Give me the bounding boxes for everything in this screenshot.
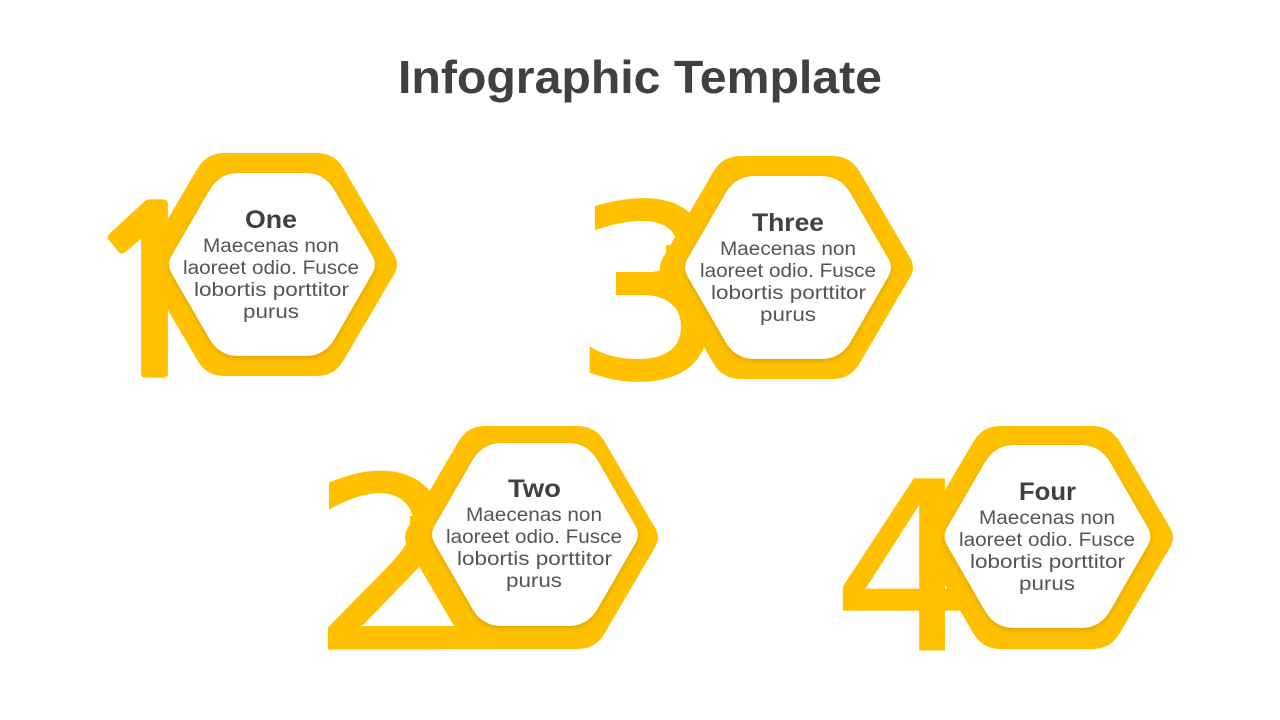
heading: One bbox=[245, 206, 297, 234]
panel: four bbox=[833, 426, 1173, 704]
body text: laoreet odio. Fusce bbox=[446, 527, 622, 548]
heading: Two bbox=[508, 475, 561, 503]
text block bbox=[183, 206, 359, 323]
body text: laoreet odio. Fusce bbox=[183, 258, 359, 279]
numeral 1: 1 bbox=[79, 181, 220, 411]
title: Infographic Template bbox=[398, 51, 882, 103]
body text: Maecenas non bbox=[979, 508, 1115, 529]
body text: laoreet odio. Fusce bbox=[959, 530, 1135, 551]
numeral 3: 3 bbox=[573, 156, 725, 434]
numeral 2: 2 bbox=[312, 428, 463, 704]
inner white hexagon bbox=[945, 445, 1150, 628]
outer hexagon bbox=[144, 153, 397, 376]
panel: two bbox=[312, 426, 658, 704]
body text: lobortis porttitor bbox=[711, 283, 867, 304]
body text: Maecenas non bbox=[720, 239, 856, 260]
outer hexagon bbox=[660, 156, 913, 379]
heading: Three bbox=[752, 209, 824, 237]
body text: Maecenas non bbox=[466, 505, 602, 526]
numeral 4: 4 bbox=[833, 434, 981, 704]
body text: lobortis porttitor bbox=[970, 552, 1126, 573]
panel: three bbox=[573, 156, 913, 434]
outer hexagon bbox=[920, 426, 1173, 649]
body text: laoreet odio. Fusce bbox=[700, 261, 876, 282]
text block bbox=[959, 478, 1135, 595]
heading: Four bbox=[1019, 478, 1076, 506]
body text: Maecenas non bbox=[203, 236, 339, 257]
body text: purus bbox=[506, 571, 562, 592]
outer hexagon bbox=[405, 426, 658, 649]
text block bbox=[700, 209, 876, 326]
text block bbox=[446, 475, 622, 592]
inner white hexagon bbox=[685, 176, 891, 359]
body text: purus bbox=[760, 305, 816, 326]
body text: purus bbox=[1019, 574, 1075, 595]
inner white hexagon bbox=[169, 173, 375, 356]
body text: purus bbox=[243, 302, 299, 323]
inner white hexagon bbox=[432, 443, 638, 626]
body text: lobortis porttitor bbox=[457, 549, 613, 570]
panel: one bbox=[79, 153, 397, 411]
body text: lobortis porttitor bbox=[194, 280, 350, 301]
